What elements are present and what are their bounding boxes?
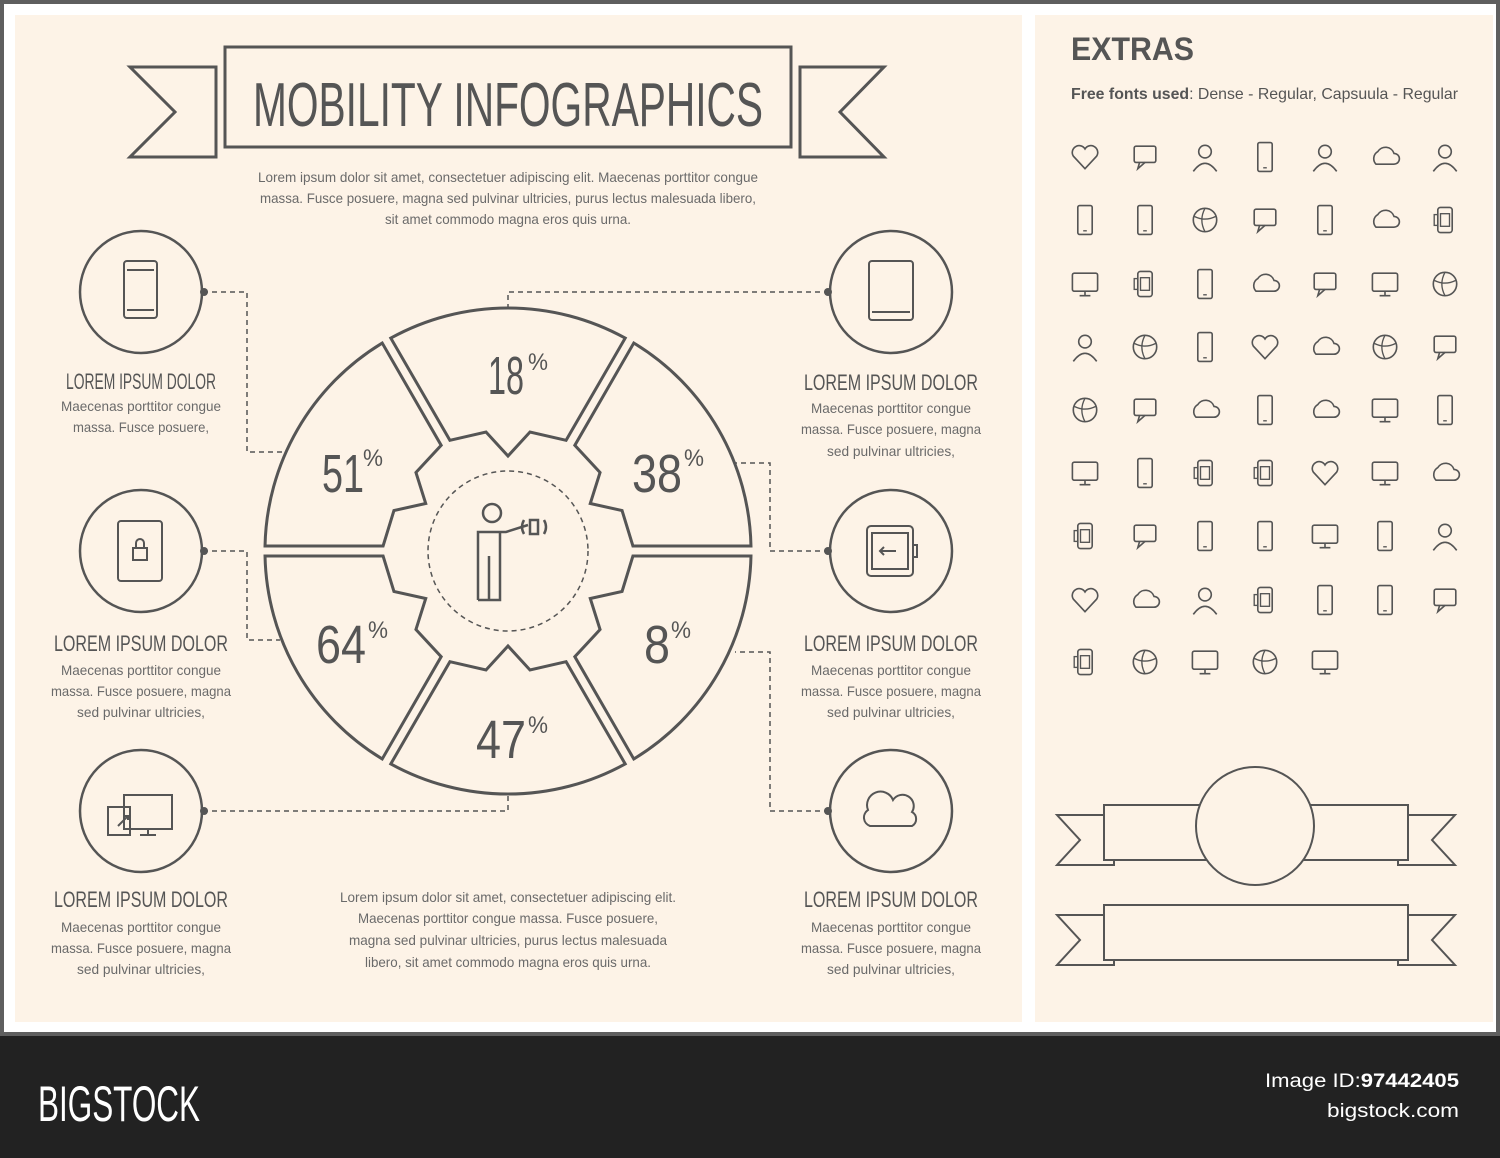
labels: sed pulvinar ultricies, — [827, 443, 955, 459]
percentages: % — [363, 445, 383, 472]
ribbon with circle — [1057, 767, 1455, 885]
percentages: 8 — [644, 615, 670, 675]
percentages — [316, 346, 704, 770]
bottom text: libero, sit amet commodo magna eros quis urna. — [365, 954, 651, 970]
labels: massa. Fusce posuere, magna — [801, 421, 981, 437]
percentages: % — [528, 349, 548, 376]
labels: LOREM IPSUM DOLOR — [54, 631, 228, 656]
ring chart — [239, 308, 777, 794]
footer url: bigstock.com — [1327, 1101, 1459, 1122]
icon grid — [1072, 143, 1459, 675]
percentages: 51 — [322, 444, 364, 504]
percentages: % — [528, 712, 548, 739]
panel: main — [15, 15, 1022, 1022]
intro text: massa. Fusce posuere, magna sed pulvinar ultricies, purus lectus malesuada libero, — [260, 190, 756, 206]
footer bar — [0, 1036, 1500, 1158]
labels: Maecenas porttitor congue — [61, 398, 221, 414]
labels: sed pulvinar ultricies, — [827, 961, 955, 977]
labels: LOREM IPSUM DOLOR — [54, 887, 228, 912]
fonts note: Free fonts used: Dense - Regular, Capsuula - Regular — [1071, 86, 1459, 103]
dashed inner circle — [428, 471, 588, 631]
labels: sed pulvinar ultricies, — [827, 704, 955, 720]
bottom text: Maecenas porttitor congue massa. Fusce posuere, — [358, 910, 658, 926]
panel: extras — [1035, 15, 1493, 1022]
bottom text: Lorem ipsum dolor sit amet, consectetuer adipiscing elit. — [340, 889, 676, 905]
dashed connectors — [203, 292, 829, 811]
title banner — [130, 47, 884, 157]
labels: Maecenas porttitor congue — [811, 400, 971, 416]
ribbon plain — [1057, 905, 1455, 965]
connector dots — [200, 288, 832, 815]
percentages: % — [684, 445, 704, 472]
labels: LOREM IPSUM DOLOR — [804, 631, 978, 656]
bottom text: magna sed pulvinar ultricies, purus lectus malesuada — [349, 932, 667, 948]
labels: massa. Fusce posuere, magna — [801, 683, 981, 699]
labels: Maecenas porttitor congue — [811, 919, 971, 935]
bottom text — [340, 889, 676, 970]
labels: LOREM IPSUM DOLOR — [804, 887, 978, 912]
percentages: % — [368, 617, 388, 644]
labels — [51, 369, 981, 977]
labels: LOREM IPSUM DOLOR — [804, 370, 978, 395]
labels: massa. Fusce posuere, magna — [51, 940, 231, 956]
percentages: 18 — [488, 346, 524, 406]
extras heading: EXTRAS — [1071, 31, 1194, 67]
title banner: MOBILITY INFOGRAPHICS — [253, 71, 763, 140]
labels: Maecenas porttitor congue — [811, 662, 971, 678]
labels: massa. Fusce posuere, magna — [801, 940, 981, 956]
percentages: % — [671, 617, 691, 644]
circle icons — [108, 261, 917, 835]
percentages: 64 — [316, 615, 366, 675]
intro text: Lorem ipsum dolor sit amet, consectetuer adipiscing elit. Maecenas porttitor congue — [258, 169, 758, 185]
labels: Maecenas porttitor congue — [61, 919, 221, 935]
labels: sed pulvinar ultricies, — [77, 704, 205, 720]
icon: person with phone — [478, 504, 546, 600]
percentages: 38 — [632, 444, 682, 504]
icon circles — [80, 231, 952, 872]
footer logo: BIGSTOCK — [38, 1076, 200, 1132]
labels: Maecenas porttitor congue — [61, 662, 221, 678]
intro text: sit amet commodo magna eros quis urna. — [385, 211, 631, 227]
labels: sed pulvinar ultricies, — [77, 961, 205, 977]
labels: massa. Fusce posuere, — [73, 419, 209, 435]
footer id: Image ID: 97442405 — [1265, 1071, 1459, 1092]
intro text — [258, 169, 758, 227]
labels: massa. Fusce posuere, magna — [51, 683, 231, 699]
percentages: 47 — [476, 710, 526, 770]
labels: LOREM IPSUM DOLOR — [66, 369, 216, 394]
